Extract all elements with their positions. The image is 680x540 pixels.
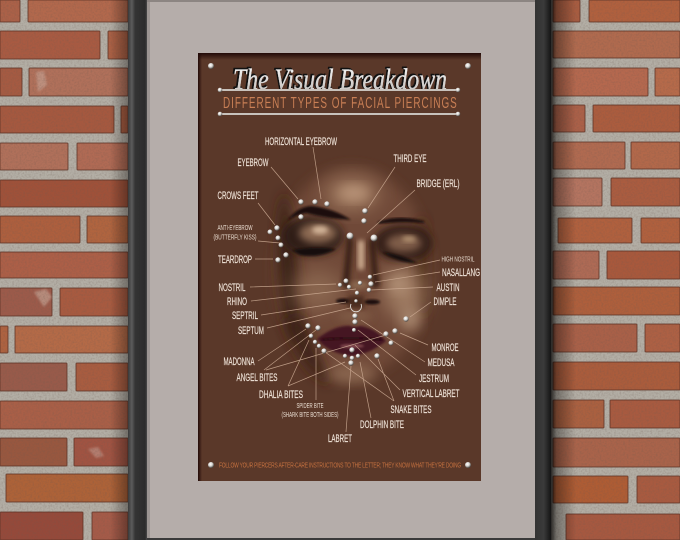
labels: right side: MEDUSA <box>428 357 455 369</box>
labels: left side: ANGEL BITES <box>236 372 278 384</box>
poster corner studs <box>208 63 471 468</box>
picture frame <box>128 0 551 540</box>
labels: left side: HORIZONTAL EYEBROW <box>265 136 337 148</box>
labels: left side: NOSTRIL <box>218 282 246 294</box>
labels: right side: DOLPHIN BITE <box>360 419 404 431</box>
right eyelid <box>386 234 422 252</box>
labels: left side: DHALIA BITES <box>259 389 303 401</box>
labels: left side: ANTI-EYEBROW <box>218 225 253 232</box>
labels: left side <box>214 136 352 445</box>
title: The Visual Breakdown <box>233 63 447 96</box>
left lashes <box>292 248 336 256</box>
labels: right side: SNAKE BITES <box>390 404 432 416</box>
labels: left side: SEPTRIL <box>232 310 258 322</box>
lower title rule <box>218 112 460 116</box>
lips <box>317 326 386 356</box>
footer note: FOLLOW YOUR PIERCERS AFTER-CARE INSTRUCTIONS TO THE LETTER; THEY KNOW WHAT THEY'RE DOING <box>219 463 461 470</box>
labels: right side: THIRD EYE <box>394 153 426 165</box>
upper title rule <box>218 88 460 92</box>
labels: right side: NASALLANG <box>442 267 480 279</box>
labels: right side: HIGH NOSTRIL <box>442 256 475 264</box>
illustration: face <box>274 167 432 385</box>
left eye socket <box>283 217 343 255</box>
right eye socket <box>374 225 432 261</box>
poster panel <box>198 53 481 481</box>
labels: right side <box>360 153 480 431</box>
labels: left side: (SHARK BITE BOTH SIDES) <box>282 412 338 419</box>
left eyebrow <box>287 206 351 221</box>
labels: left side: MADONNA <box>224 356 255 368</box>
labels: left side: (BUTTERFLY KISS) <box>214 234 256 242</box>
labels: left side: TEARDROP <box>218 254 252 266</box>
labels: left side: LABRET <box>328 433 352 445</box>
labels: left side: EYEBROW <box>238 157 269 169</box>
labels: right side: JESTRUM <box>419 373 449 385</box>
labels: right side: MONROE <box>432 342 458 354</box>
leader lines <box>250 147 440 432</box>
labels: left side: CROWS FEET <box>218 190 259 202</box>
brick wall: right <box>550 0 680 540</box>
labels: left side: SPIDER BITE <box>296 403 324 410</box>
labels: left side: SEPTUM <box>238 325 264 337</box>
labels: right side: AUSTIN <box>436 282 460 294</box>
labels: right side: DIMPLE <box>434 296 456 308</box>
right lashes <box>382 252 418 263</box>
brick wall: left <box>0 0 130 540</box>
labels: right side: VERTICAL LABRET <box>402 388 460 400</box>
septum ring <box>350 304 362 312</box>
nose <box>342 235 353 290</box>
title: The Visual Breakdown <box>232 62 446 95</box>
subtitle: DIFFERENT TYPES OF FACIAL PIERCINGS <box>223 94 457 112</box>
labels: left side: RHINO <box>227 296 247 308</box>
left eyelid <box>299 223 337 243</box>
labels: right side: BRIDGE (ERL) <box>416 178 460 190</box>
piercing dots <box>268 199 409 366</box>
right eyebrow <box>378 219 424 223</box>
